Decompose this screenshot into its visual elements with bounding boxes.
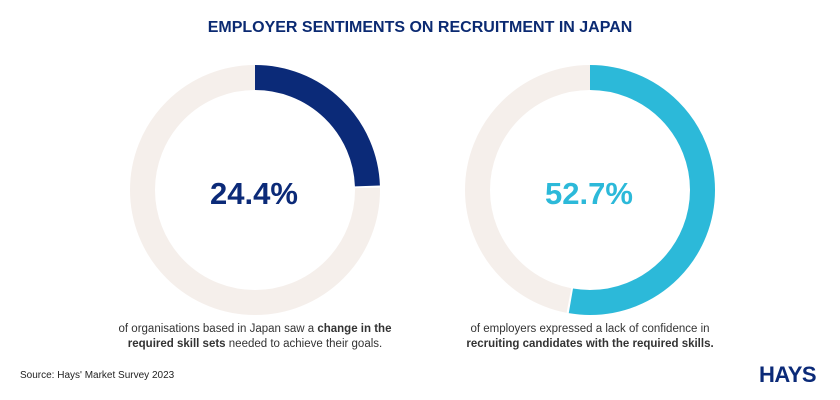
caption right: of employers expressed a lack of confidence in recruiting candidates with the required skills. [466, 323, 714, 350]
value: 52.7%: 52.7% [545, 176, 633, 211]
donut: 52.7% [478, 78, 702, 302]
caption left: of organisations based in Japan saw a change in the required skill sets needed to achieve their goals. [119, 323, 391, 350]
title: EMPLOYER SENTIMENTS ON RECRUITMENT IN JAPAN [208, 19, 632, 36]
donut: 24.4% [142, 78, 368, 302]
logo: HAYS: HAYS [759, 362, 816, 387]
source: Source: Hays' Market Survey 2023 [20, 370, 174, 381]
value: 24.4%: 24.4% [210, 176, 298, 211]
